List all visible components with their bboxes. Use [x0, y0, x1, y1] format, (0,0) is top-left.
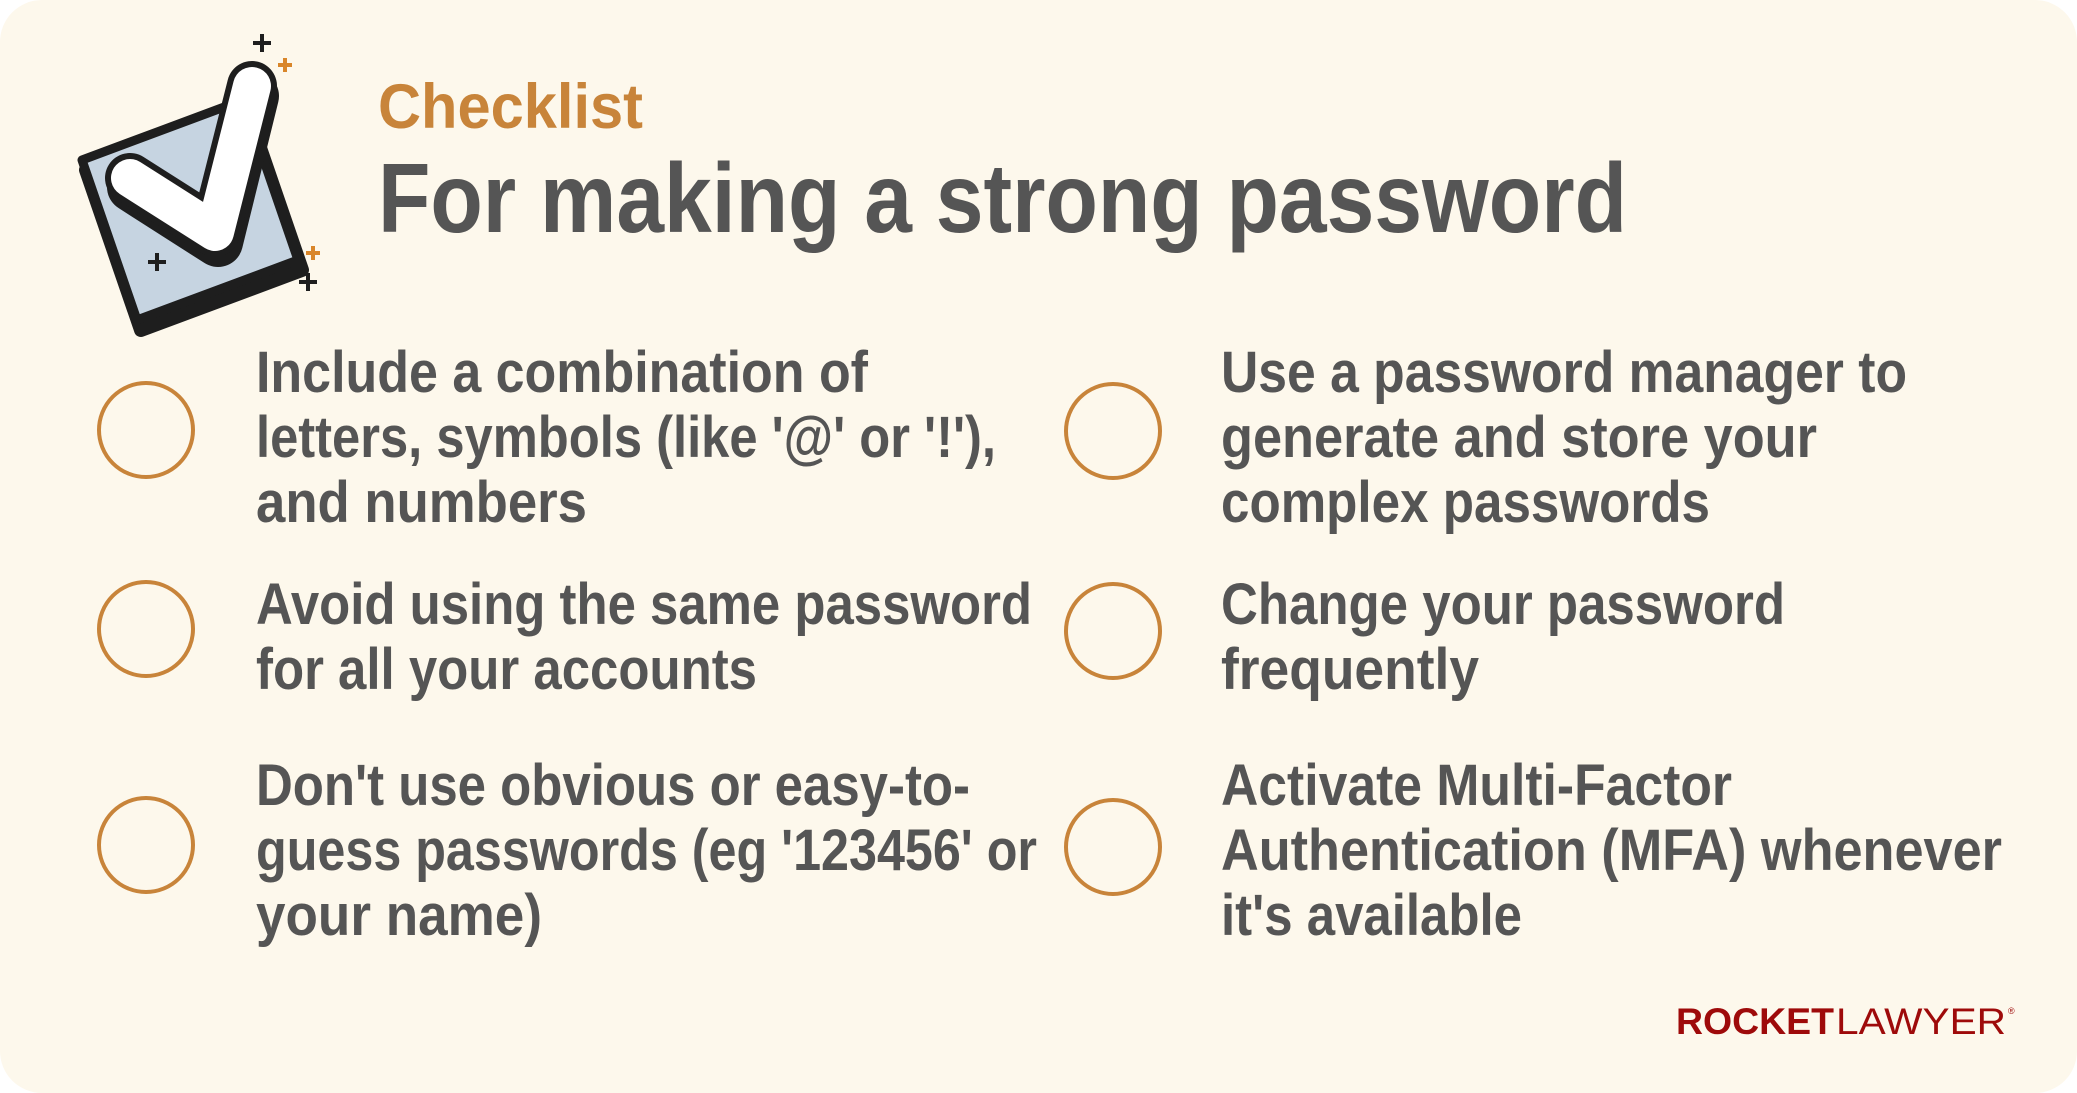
logo: Rocket Lawyer: ®: [2008, 1006, 2015, 1016]
item 3 left: Don't use obvious or easy-to-: [256, 753, 970, 818]
item 2 left: for all your accounts: [256, 637, 757, 702]
item 1 right: generate and store your: [1221, 405, 1817, 470]
item 3 right: [1066, 753, 2002, 948]
item 2 right: [1066, 572, 1785, 702]
item 2 left: [99, 572, 1032, 702]
item 1 left: and numbers: [256, 470, 587, 535]
item 1 left: letters, symbols (like '@' or '!'),: [256, 405, 996, 470]
item 1 right: complex passwords: [1221, 470, 1710, 535]
logo: Rocket Lawyer: ROCKET: [1676, 1001, 1834, 1042]
subtitle: Checklist: Checklist: [378, 72, 643, 142]
icon: checkbox with check mark: [82, 34, 320, 330]
item 3 right: it's available: [1221, 883, 1522, 948]
title: For making a strong password: [378, 143, 1627, 253]
item 1 left: [99, 340, 996, 535]
logo: Rocket Lawyer: LAWYER: [1836, 1001, 2006, 1042]
item 1 right: [1066, 340, 1907, 535]
item 3 left: your name): [256, 883, 542, 948]
item 2 right: Change your password: [1221, 572, 1785, 637]
item 3 left: guess passwords (eg '123456' or: [256, 818, 1037, 883]
item 1 left: Include a combination of: [256, 340, 869, 405]
item 3 right: Authentication (MFA) whenever: [1221, 818, 2002, 883]
item 1 right: Use a password manager to: [1221, 340, 1907, 405]
item 3 left: [99, 753, 1037, 948]
item 2 right: frequently: [1221, 637, 1479, 702]
item 3 right: Activate Multi-Factor: [1221, 753, 1732, 818]
logo: Rocket Lawyer: [1676, 1001, 2015, 1042]
item 2 left: Avoid using the same password: [256, 572, 1032, 637]
